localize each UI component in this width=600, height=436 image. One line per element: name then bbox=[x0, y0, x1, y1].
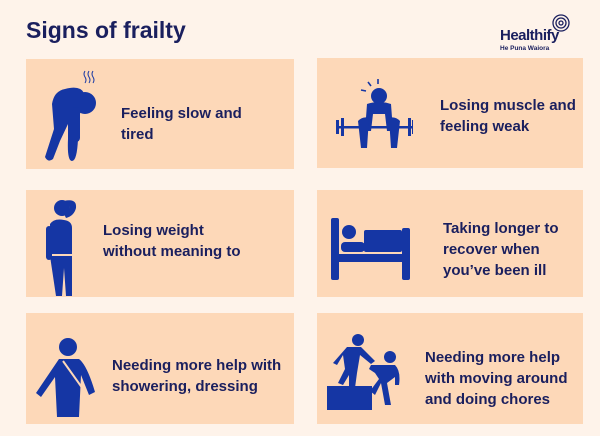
icon: bed bbox=[331, 218, 410, 280]
text bbox=[121, 105, 242, 143]
text: Feeling slow and bbox=[121, 105, 242, 122]
text: with moving around bbox=[425, 370, 568, 387]
text: and doing chores bbox=[425, 391, 550, 408]
icon: weightlifter bbox=[336, 79, 413, 148]
icon: tired person bbox=[45, 70, 96, 161]
text: recover when bbox=[443, 241, 540, 258]
panel: muscle bbox=[317, 58, 583, 168]
logo text bbox=[500, 27, 560, 52]
text bbox=[425, 349, 568, 408]
panel: weight bbox=[26, 190, 294, 297]
text: you’ve been ill bbox=[443, 262, 546, 279]
logo bbox=[500, 14, 570, 52]
text: tired bbox=[121, 126, 154, 143]
text: Losing muscle and bbox=[440, 97, 576, 114]
text bbox=[440, 97, 576, 135]
logo text: Healthify bbox=[500, 27, 559, 44]
icon: helping hand bbox=[327, 334, 400, 410]
title: Signs of frailty bbox=[26, 17, 186, 43]
text: Needing more help with bbox=[112, 357, 281, 374]
text: Losing weight bbox=[103, 222, 204, 239]
text: Needing more help bbox=[425, 349, 560, 366]
text: without meaning to bbox=[103, 243, 240, 260]
text: feeling weak bbox=[440, 118, 529, 135]
text bbox=[103, 222, 240, 260]
logo text: He Puna Waiora bbox=[500, 45, 549, 52]
panel: recover bbox=[317, 190, 583, 297]
text: showering, dressing bbox=[112, 378, 258, 395]
panel: slow and tired bbox=[26, 59, 294, 169]
icon: dressing person bbox=[36, 338, 95, 417]
text bbox=[443, 220, 559, 279]
icon: person holding head bbox=[46, 200, 76, 296]
panel: showering bbox=[26, 313, 294, 424]
panel: moving around bbox=[317, 313, 583, 424]
text bbox=[112, 357, 281, 395]
logo icon bbox=[552, 14, 570, 32]
text: Taking longer to bbox=[443, 220, 559, 237]
